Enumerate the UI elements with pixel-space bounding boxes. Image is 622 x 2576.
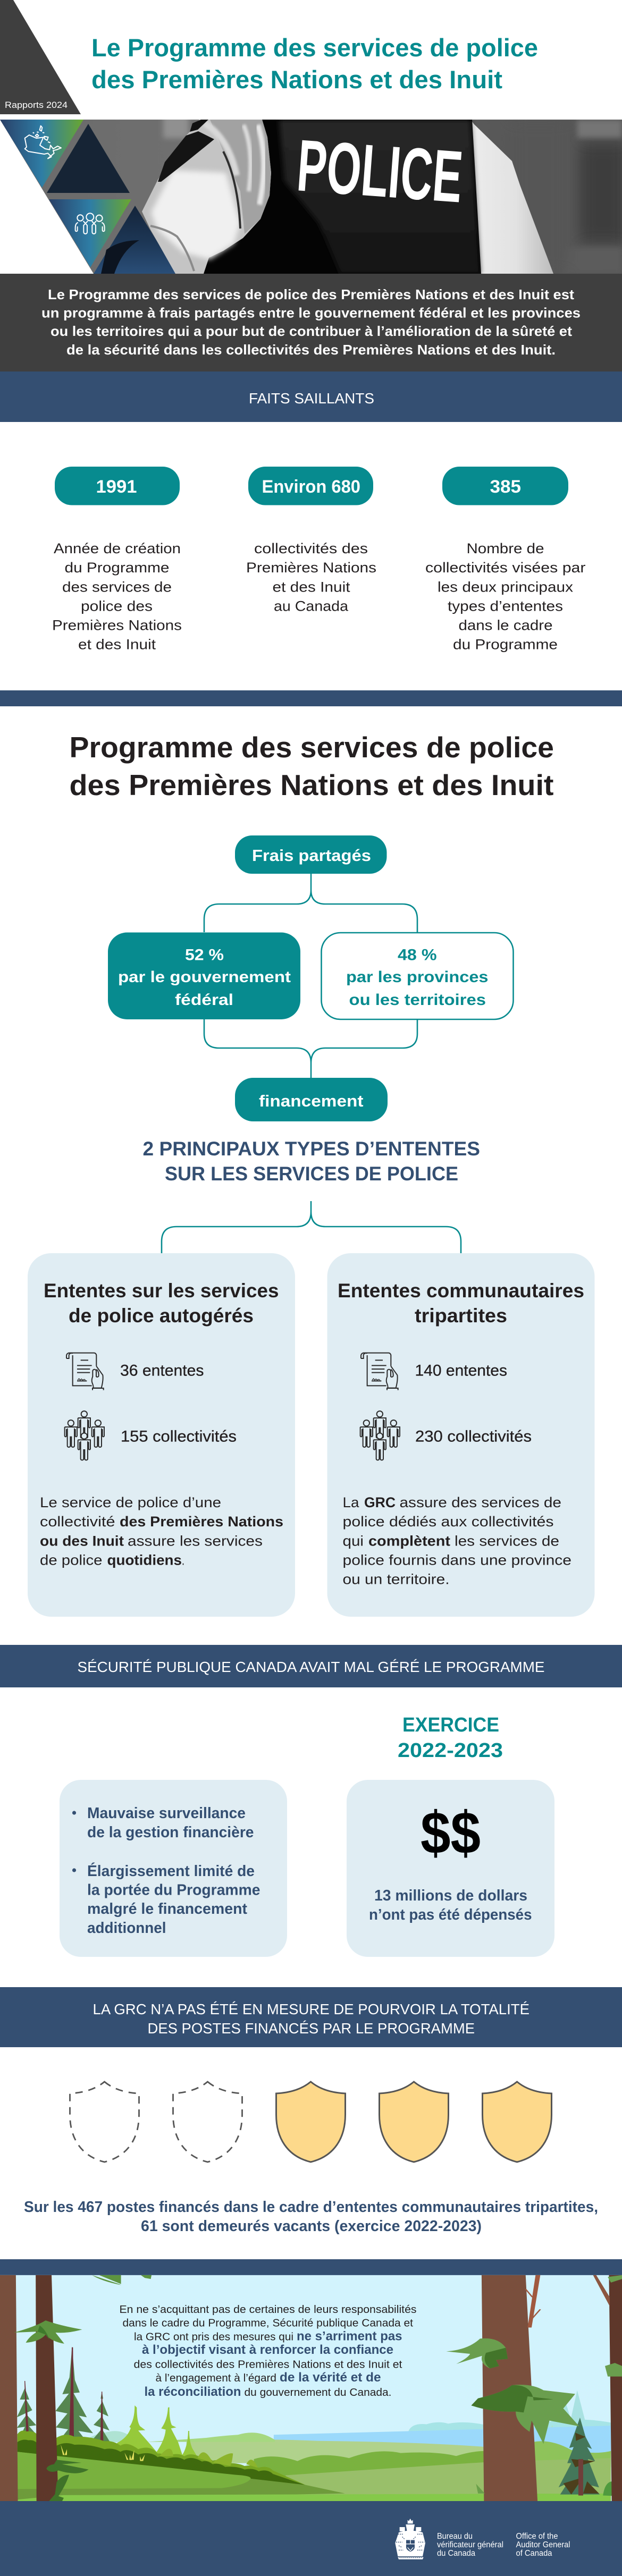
panel heading: Ententes sur les services <box>44 1280 279 1302</box>
foreground hill <box>18 2452 345 2500</box>
forest message: de la vérité et de <box>280 2370 381 2385</box>
fact: 1991: des services de <box>62 579 172 595</box>
pine trees <box>17 2347 113 2457</box>
title: Le Programme des services de police <box>91 33 538 62</box>
panel heading: de police autogérés <box>69 1305 254 1327</box>
shields: vacant and filled positions <box>70 2082 552 2162</box>
panel description: ou des Inuit <box>40 1533 124 1549</box>
forest message: du gouvernement du Canada. <box>245 2386 391 2398</box>
box: 48 % <box>321 933 514 1019</box>
pill: financement <box>235 1078 388 1121</box>
panel: problèmes de gestion <box>60 1780 287 1957</box>
banner: sécurité publique: SÉCURITÉ PUBLIQUE CANADA AVAIT MAL GÉRÉ LE PROGRAMME <box>78 1659 544 1675</box>
banner: GRC: DES POSTES FINANCÉS PAR LE PROGRAMME <box>148 2020 475 2037</box>
icon: agreement document <box>361 1353 398 1390</box>
fact: 385: Nombre de <box>467 540 544 556</box>
panel description: GRC <box>364 1494 396 1510</box>
fact: environ 680: et des Inuit <box>272 579 350 595</box>
panel description <box>342 1494 571 1587</box>
panel description: des Premières Nations <box>120 1514 283 1530</box>
arm <box>94 206 177 274</box>
forest message: des collectivités des Premières Nations et des Inuit et <box>134 2359 402 2370</box>
vacancies statement: 61 sont demeurés vacants (exercice 2022-2023) <box>141 2218 482 2235</box>
panel description: qui <box>342 1533 364 1549</box>
POLICE lettering: POLICE <box>295 124 465 218</box>
filled shield 2 <box>380 2082 449 2162</box>
bushes <box>18 2430 307 2486</box>
shoulder patch <box>158 131 214 182</box>
illustration: forest scene <box>0 2275 622 2502</box>
fact: 1991: et des Inuit <box>78 637 156 653</box>
fact: 1991: du Programme <box>65 560 169 576</box>
fact: 385: collectivités visées par <box>425 560 586 576</box>
french wordmark: vérificateur général <box>437 2540 503 2549</box>
fact: 1991 <box>52 467 182 653</box>
section heading <box>69 731 554 801</box>
fact: environ 680 <box>246 467 376 614</box>
forest message: dans le cadre du Programme, Sécurité publique Canada et <box>122 2317 413 2329</box>
connector: merge <box>204 1019 417 1078</box>
bullet two <box>72 1862 260 1937</box>
stat: 155 collectivités: 155 collectivités <box>121 1428 237 1446</box>
english wordmark: Office of the <box>516 2532 558 2541</box>
dark triangle <box>47 124 130 193</box>
intro text band: ou les territoires qui a pour but de contribuer à l’amélioration de la sûreté et <box>51 323 572 339</box>
intro text band: un programme à frais partagés entre le gouvernement fédéral et les provinces <box>41 305 581 321</box>
banner: sécurité publique <box>0 1645 622 1687</box>
icon: coat of arms <box>395 2519 425 2560</box>
icon: people <box>65 1411 104 1460</box>
unspent funds text: 13 millions de dollars <box>374 1887 527 1904</box>
fact: 385: dans le cadre <box>458 618 553 634</box>
banner: faits saillants <box>0 371 622 422</box>
panel description: . <box>182 1552 184 1568</box>
bullet one: Mauvaise surveillance <box>87 1805 246 1822</box>
divider band <box>0 690 622 706</box>
section heading: des Premières Nations et des Inuit <box>69 768 554 801</box>
forest message: la réconciliation <box>145 2385 241 2399</box>
panel heading <box>44 1280 279 1327</box>
bullet two: malgré le financement <box>87 1901 247 1918</box>
english wordmark <box>516 2532 570 2558</box>
connector: split <box>204 874 417 932</box>
banner: faits saillants: FAITS SAILLANTS <box>249 390 374 407</box>
icon: dollar signs: $$ <box>421 1800 481 1866</box>
box: 48 %: ou les territoires <box>349 991 486 1009</box>
vest <box>199 120 481 274</box>
fact: 385: 385 <box>490 477 521 497</box>
forest message: à l’objectif visant à renforcer la confiance <box>142 2343 393 2357</box>
panel description: de police <box>40 1552 102 1568</box>
icon: people <box>360 1411 400 1460</box>
lime trees <box>117 2405 198 2457</box>
fact: 1991: 1991 <box>96 477 137 497</box>
foliage on left trunk <box>46 2460 89 2502</box>
panel description: assure les services <box>128 1533 263 1549</box>
background: sky, lake and distant hills <box>0 2275 622 2502</box>
filled shield 3 <box>483 2082 552 2162</box>
right sleeve <box>470 120 553 274</box>
gradient triangle with people <box>49 199 131 267</box>
footer <box>0 2501 622 2576</box>
left sleeve <box>142 120 271 274</box>
intro text band: de la sécurité dans les collectivités des Premières Nations et des Inuit. <box>66 342 556 358</box>
heading: deux principaux types: 2 PRINCIPAUX TYPES D’ENTENTES <box>142 1138 480 1160</box>
hero photo: police officer vest <box>0 114 622 274</box>
vacant shield 2 <box>173 2082 242 2162</box>
grass tufts <box>61 2444 145 2461</box>
stat: 230 collectivités: 230 collectivités <box>415 1428 532 1446</box>
connector: two agreement types <box>162 1201 461 1253</box>
heading: exercice 2022-2023: 2022-2023 <box>398 1739 503 1762</box>
banner: GRC <box>0 1987 622 2047</box>
vacancies statement <box>24 2199 598 2235</box>
title: des Premières Nations et des Inuit <box>91 65 502 94</box>
panel description: Le service de police d’une <box>40 1494 221 1510</box>
bullet one: de la gestion financière <box>87 1824 254 1841</box>
stat: 36 ententes: 36 ententes <box>120 1362 204 1380</box>
unspent funds text <box>369 1887 532 1923</box>
panel description: quotidiens <box>107 1552 182 1568</box>
pill: frais partagés <box>235 835 387 874</box>
vacancies statement: Sur les 467 postes financés dans le cadre d’ententes communautaires tripartites, <box>24 2199 598 2216</box>
panel description: assure des services de <box>400 1494 561 1510</box>
fact: 385: les deux principaux <box>438 579 574 595</box>
panel heading <box>338 1280 584 1327</box>
heading: deux principaux types: SUR LES SERVICES DE POLICE <box>165 1163 458 1185</box>
box: 52 %: 52 % <box>185 946 224 964</box>
icon: agreement document <box>66 1353 104 1390</box>
panel: ententes tripartites <box>327 1253 594 1617</box>
panel description: ou un territoire. <box>342 1571 450 1587</box>
heading: exercice 2022-2023: EXERCICE <box>402 1714 499 1736</box>
pill: financement: financement <box>259 1092 364 1110</box>
bullet two: la portée du Programme <box>87 1881 260 1898</box>
box: 48 %: 48 % <box>398 946 437 964</box>
heading: exercice 2022-2023 <box>398 1714 503 1762</box>
banner: GRC: LA GRC N’A PAS ÉTÉ EN MESURE DE POURVOIR LA TOTALITÉ <box>93 2001 529 2017</box>
panel heading: Ententes communautaires <box>338 1280 584 1302</box>
header: report tab <box>0 0 81 114</box>
bullet one <box>72 1805 254 1841</box>
panel heading: tripartites <box>415 1305 507 1327</box>
forest message: la GRC ont pris des mesures qui <box>134 2331 293 2343</box>
fact: 385: du Programme <box>453 637 558 653</box>
fact: environ 680: collectivités des <box>254 540 368 556</box>
fact: environ 680: Environ 680 <box>262 477 360 497</box>
panel: fonds non dépensés <box>347 1780 554 1957</box>
intro text band: Le Programme des services de police des Premières Nations et des Inuit est <box>48 286 574 302</box>
pine tree right <box>559 2418 613 2496</box>
fact: 1991: Année de création <box>54 540 181 556</box>
panel: ententes autogérées <box>28 1253 295 1617</box>
panel description: complètent <box>368 1533 450 1549</box>
unspent funds text: n’ont pas été dépensés <box>369 1906 532 1923</box>
stat: 140 ententes: 140 ententes <box>415 1362 507 1380</box>
fact: 385 <box>425 467 586 653</box>
foliage <box>14 2275 622 2494</box>
intro text band <box>0 274 622 371</box>
filled shield 1 <box>276 2082 346 2162</box>
fact: environ 680: Premières Nations <box>246 560 376 576</box>
box: 48 %: par les provinces <box>346 968 488 986</box>
panel description: collectivité <box>40 1514 115 1530</box>
tree trunks <box>0 2275 622 2501</box>
title <box>91 33 538 94</box>
french wordmark: Bureau du <box>437 2532 473 2541</box>
fact: 1991: police des <box>81 598 153 614</box>
panel description <box>40 1494 283 1568</box>
heading: deux principaux types <box>142 1138 480 1185</box>
white cut-out <box>0 120 94 274</box>
box: 52 %: par le gouvernement <box>118 968 291 986</box>
fact: 385: types d’ententes <box>448 598 563 614</box>
bullet two: additionnel <box>87 1920 166 1937</box>
panel description: police dédiés aux collectivités <box>342 1514 554 1530</box>
box: 52 % <box>108 932 300 1019</box>
forest message: à l’engagement à l’égard <box>155 2372 276 2384</box>
section heading: Programme des services de police <box>69 731 554 764</box>
gradient triangle with map of Canada <box>0 120 83 188</box>
panel description: les services de <box>455 1533 559 1549</box>
box: 52 %: fédéral <box>175 991 233 1009</box>
foreground: grass, right pine, trunks, foliage <box>0 2275 622 2501</box>
fact: 1991: Premières Nations <box>52 618 182 634</box>
forest message: En ne s’acquittant pas de certaines de leurs responsabilités <box>119 2303 417 2316</box>
panel description: police fournis dans une province <box>342 1552 571 1568</box>
pill: frais partagés: Frais partagés <box>252 846 371 865</box>
banner above forest <box>0 2259 622 2276</box>
panel description: La <box>342 1494 359 1510</box>
bullet two: Élargissement limité de <box>87 1862 255 1880</box>
left forest: pines, bushes, hill <box>17 2347 345 2500</box>
forest message <box>119 2303 417 2399</box>
english wordmark: of Canada <box>516 2549 552 2558</box>
french wordmark <box>437 2532 503 2558</box>
fact: environ 680: au Canada <box>274 598 349 614</box>
vacant shield 1 <box>70 2082 139 2162</box>
forest message: ne s’arriment pas <box>297 2329 402 2344</box>
english wordmark: Auditor General <box>516 2540 570 2549</box>
report year label: Rapports 2024 <box>5 100 68 110</box>
french wordmark: du Canada <box>437 2549 475 2558</box>
